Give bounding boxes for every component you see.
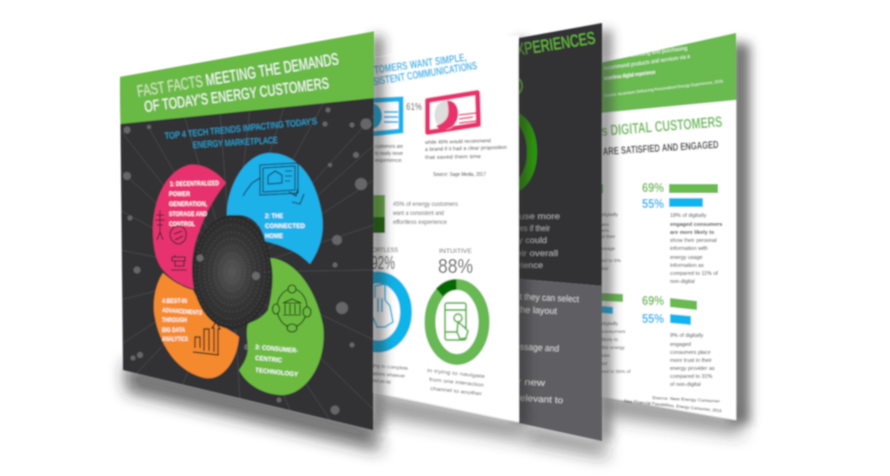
bar chart: bottom: 55% bbox=[642, 312, 664, 326]
text block: top stat: energy usage bbox=[670, 255, 703, 261]
bar chart: top: 55% bbox=[642, 197, 664, 211]
text block: top stat: show their personal bbox=[670, 238, 717, 244]
text block: bottom stat: engaged bbox=[670, 342, 691, 348]
text block: left column fragments: likely to bbox=[602, 337, 618, 343]
heading: green title band bbox=[120, 32, 374, 124]
bar chart: top bbox=[600, 181, 718, 211]
text block: left column fragments: red to 55% of bbox=[602, 369, 631, 375]
stat: effortless ring: EFFORTLESS bbox=[362, 247, 398, 254]
text block: top stat bbox=[670, 213, 722, 285]
stat: intuitive ring: 88% bbox=[438, 256, 473, 278]
heading: simple communications: CUSTOMERS WANT SIMPLE, bbox=[357, 52, 467, 79]
panel: blue blob connected home bbox=[227, 153, 323, 264]
bar chart: top: 69% bbox=[642, 181, 664, 195]
stat: effortless ring: ing to complete bbox=[373, 363, 408, 372]
text block: 45% consistent bbox=[392, 201, 458, 226]
panel: pink blob decentralized power: STORAGE AND bbox=[169, 211, 207, 218]
icon: connected ring bbox=[272, 285, 311, 332]
stat: effortless ring: ations whatever bbox=[373, 371, 406, 380]
text block: left column fragments: consumers bbox=[602, 329, 626, 335]
text block: left column fragments: ers bbox=[602, 228, 609, 234]
text block: upper: their overall bbox=[508, 248, 558, 258]
heading: simple communications bbox=[373, 52, 478, 86]
panel: blue blob connected home: HOME bbox=[265, 233, 284, 240]
heading: simple communications: CONSISTENT COMMUNICATIONS bbox=[356, 60, 478, 91]
green header band: involved in selecting and purchasing bbox=[604, 46, 688, 62]
text block: upper: to use more bbox=[508, 211, 560, 221]
panel: orange blob big data: BIG DATA bbox=[162, 327, 185, 334]
text block: upper: hey could bbox=[508, 235, 547, 245]
icon: power pylon bbox=[155, 210, 165, 240]
text block: top stat: compared to 11% of bbox=[670, 271, 718, 277]
text block: top stat: engaged consumers bbox=[670, 222, 722, 228]
text block: left column fragments: usage bbox=[602, 247, 615, 252]
text block: bottom stat bbox=[670, 333, 715, 388]
text block: left column fragments bbox=[602, 212, 631, 375]
subheading: top 4 tech trends: ENERGY MARKETPLACE bbox=[193, 135, 278, 150]
icon: rising bars arrow bbox=[193, 322, 220, 355]
panel: pink blob decentralized power: CONTROL bbox=[169, 221, 195, 228]
text block: lower: e relevant to bbox=[508, 392, 563, 405]
text block: bottom stat: energy provider as bbox=[670, 366, 715, 372]
text block: lower: that they can select bbox=[508, 291, 580, 304]
panel: fast facts sheet (front) bbox=[120, 32, 384, 452]
text block: bottom stat: more trust in their bbox=[670, 358, 712, 364]
source note: Source: New Energy Consumer bbox=[652, 395, 721, 404]
panel: orange blob big data: ADVANCEMENTS bbox=[162, 307, 202, 317]
heading: digital customers: s DIGITAL CUSTOMERS bbox=[601, 114, 723, 140]
panel: orange blob big data: THROUGH bbox=[162, 317, 187, 324]
text block: tablet captions: while 45% would recommend bbox=[425, 138, 491, 146]
text block: 45% consistent: want a consistent and bbox=[392, 210, 444, 217]
icon: battery stack bbox=[171, 255, 187, 270]
panel: green blob consumer-centric technology bbox=[239, 258, 324, 395]
panel: green blob consumer-centric technology: TECHNOLOGY bbox=[255, 367, 299, 379]
panel: orange blob big data bbox=[154, 273, 239, 378]
panel: blue blob connected home: 2: THE bbox=[265, 213, 284, 220]
background dots bbox=[123, 108, 372, 414]
text block: intuitive caption bbox=[427, 368, 485, 397]
text block: top stat: 18% of digitally bbox=[670, 213, 707, 219]
heading: digital customers: ARE SATISFIED AND ENGAGED bbox=[602, 139, 719, 158]
text block: lower: for new bbox=[508, 376, 546, 388]
text block: tablet captions: experience. bbox=[375, 158, 403, 164]
text block: intuitive caption: channel to another bbox=[430, 386, 482, 397]
text block: lower: message and bbox=[508, 341, 559, 354]
text block: bottom stat: consumers place bbox=[670, 350, 711, 356]
text block: tablet captions: that saved them time bbox=[425, 154, 481, 161]
text block: bottom stat: 9% of digitally bbox=[670, 333, 704, 339]
panel: pink blob decentralized power: 1: DECENTRALIZED bbox=[170, 180, 219, 188]
text block: tablet captions bbox=[375, 138, 507, 178]
text block: tablet captions: a brand if it had a clear proposition bbox=[425, 145, 507, 153]
graphic: central textured globe bbox=[192, 215, 272, 329]
heading: green title band: FAST FACTS MEETING THE DEMANDS bbox=[136, 50, 340, 101]
text block: intuitive caption: in trying to navigate bbox=[427, 368, 485, 380]
text block: tablet captions: customers are bbox=[375, 144, 403, 150]
stat: effortless ring bbox=[372, 246, 413, 385]
text block: bottom stat: of non-digital bbox=[670, 382, 701, 388]
icon: blue tablet bbox=[372, 96, 404, 137]
stat: 61%: 61% bbox=[406, 102, 422, 113]
text block: lower bbox=[519, 292, 580, 404]
panel: pink blob decentralized power bbox=[153, 165, 226, 289]
text block: upper: rvices if their bbox=[508, 223, 550, 233]
text block: tablet captions: to easily move bbox=[375, 151, 403, 157]
source note: New Financial Possibilities, Energy Consumer, 2016 bbox=[624, 398, 723, 413]
green header band bbox=[600, 33, 736, 113]
panel: blue blob connected home: CONNECTED bbox=[265, 223, 305, 230]
text block: left column fragments: the energy bbox=[602, 345, 625, 351]
text block: 45% consistent: 45% of energy customers bbox=[393, 201, 458, 208]
text block: left column fragments: d their bbox=[602, 234, 616, 240]
heading: experiences: EXPERIENCES bbox=[507, 28, 597, 61]
icon: tablet with hands bbox=[243, 163, 304, 204]
text block: left column fragments: digitally bbox=[602, 321, 619, 327]
text block: left column fragments: are bbox=[602, 222, 609, 228]
text block: left column fragments: ed bbox=[602, 361, 608, 367]
panel: experiences sheet (dark) bbox=[516, 22, 622, 467]
stat: effortless ring: 92% bbox=[371, 253, 395, 273]
panel: green blob consumer-centric technology: CENTRIC bbox=[255, 355, 283, 364]
text block: left column fragments: ider bbox=[602, 353, 610, 359]
text block: lower: ct the layout bbox=[508, 304, 558, 316]
panel: pink blob decentralized power: POWER bbox=[169, 191, 190, 198]
panel: digital customers sheet (back right) bbox=[600, 33, 750, 436]
stat: intuitive ring: INTUITIVE bbox=[439, 248, 473, 255]
icon: gear head bbox=[170, 226, 186, 244]
bar chart: bottom bbox=[602, 293, 697, 326]
text block: top stat: non-digital bbox=[670, 279, 695, 285]
chart: green ring bbox=[518, 113, 538, 191]
panel: simple communications sheet (white) bbox=[120, 32, 528, 452]
subheading: top 4 tech trends bbox=[164, 116, 317, 150]
text block: top stat: information as bbox=[670, 263, 704, 269]
heading: green title band: OF TODAY'S ENERGY CUSTOMERS bbox=[143, 75, 330, 116]
stat: effortless ring: ned you say bbox=[373, 378, 392, 386]
bar chart: bottom: 69% bbox=[642, 294, 664, 308]
text block: left column fragments: ital bbox=[602, 266, 608, 272]
green header band: Source: Accenture Delivering Personalized Energy Experiences, 2016 bbox=[604, 78, 724, 98]
text block: left column fragments: digitally bbox=[602, 212, 619, 218]
text block: top stat: information with bbox=[670, 246, 708, 252]
background rays bbox=[120, 100, 374, 420]
text block: tablet captions: Source: Sage Media, 2017 bbox=[433, 172, 486, 178]
green header band: recommend products and services via a bbox=[603, 54, 691, 72]
icon: pink tablet with pie bbox=[428, 92, 478, 132]
icon: green square bbox=[372, 195, 385, 233]
text block: upper bbox=[519, 213, 560, 269]
green header band: seamless digital experience bbox=[604, 70, 656, 82]
icon: green ring fragment bbox=[518, 78, 524, 94]
icon: phone with hand bbox=[445, 303, 468, 340]
text block: intuitive caption: from one interaction bbox=[429, 377, 484, 389]
text block: top stat: are more likely to bbox=[670, 230, 715, 236]
text block: bottom stat: compared to 31% bbox=[670, 374, 712, 380]
panel: pink blob decentralized power: GENERATION, bbox=[169, 201, 207, 208]
panel: orange blob big data: ANALYTICS bbox=[162, 336, 188, 343]
text block: upper: perience bbox=[508, 260, 543, 270]
panel: orange blob big data: 4:BEST-IN bbox=[162, 298, 187, 305]
text block: 45% consistent: effortless experience bbox=[393, 219, 448, 226]
text block: left column fragments: ed to 5% bbox=[602, 258, 622, 264]
heading: digital customers bbox=[601, 114, 723, 158]
stat: intuitive ring bbox=[427, 248, 485, 397]
panel: green blob consumer-centric technology: 3: CONSUMER- bbox=[255, 344, 298, 355]
subheading: top 4 tech trends: TOP 4 TECH TRENDS IMPACTING TODAY'S bbox=[164, 116, 317, 141]
